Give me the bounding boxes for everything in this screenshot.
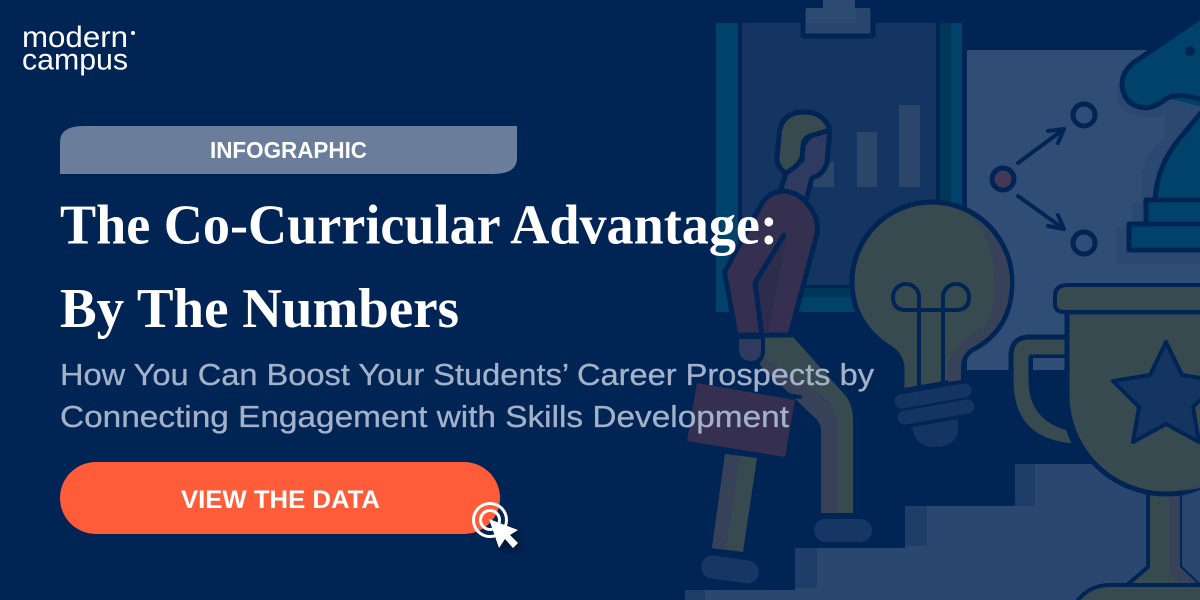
button: view the data: VIEW THE DATA bbox=[181, 486, 380, 514]
clipboard chart board bbox=[716, 0, 962, 312]
logo: campus bbox=[22, 44, 128, 76]
title bbox=[60, 194, 778, 340]
subtitle: How You Can Boost Your Students’ Career Prospects by bbox=[60, 357, 875, 392]
strategy panel bbox=[962, 50, 1200, 370]
title: The Co-Curricular Advantage: bbox=[60, 194, 778, 256]
icon: click cursor bbox=[474, 504, 521, 553]
walking person bbox=[687, 112, 872, 585]
hair bbox=[777, 112, 830, 173]
chess knight bbox=[1122, 14, 1200, 250]
button: view the data bbox=[60, 462, 500, 534]
subtitle bbox=[60, 357, 875, 434]
logo bbox=[22, 21, 135, 76]
neck and face bbox=[780, 130, 830, 200]
back leg bbox=[712, 454, 757, 552]
subtitle: Connecting Engagement with Skills Development bbox=[60, 399, 789, 434]
briefcase bbox=[687, 383, 795, 457]
tag: infographic bbox=[60, 126, 517, 174]
stairs bbox=[685, 464, 1200, 600]
tag: infographic: INFOGRAPHIC bbox=[210, 137, 367, 163]
title: By The Numbers bbox=[60, 278, 459, 340]
light bulb bbox=[852, 202, 1012, 447]
trophy bbox=[1011, 285, 1200, 600]
logo: modern bbox=[22, 21, 128, 54]
torso bbox=[724, 191, 818, 335]
illustration: background scene bbox=[685, 0, 1200, 600]
front leg bbox=[760, 337, 853, 513]
